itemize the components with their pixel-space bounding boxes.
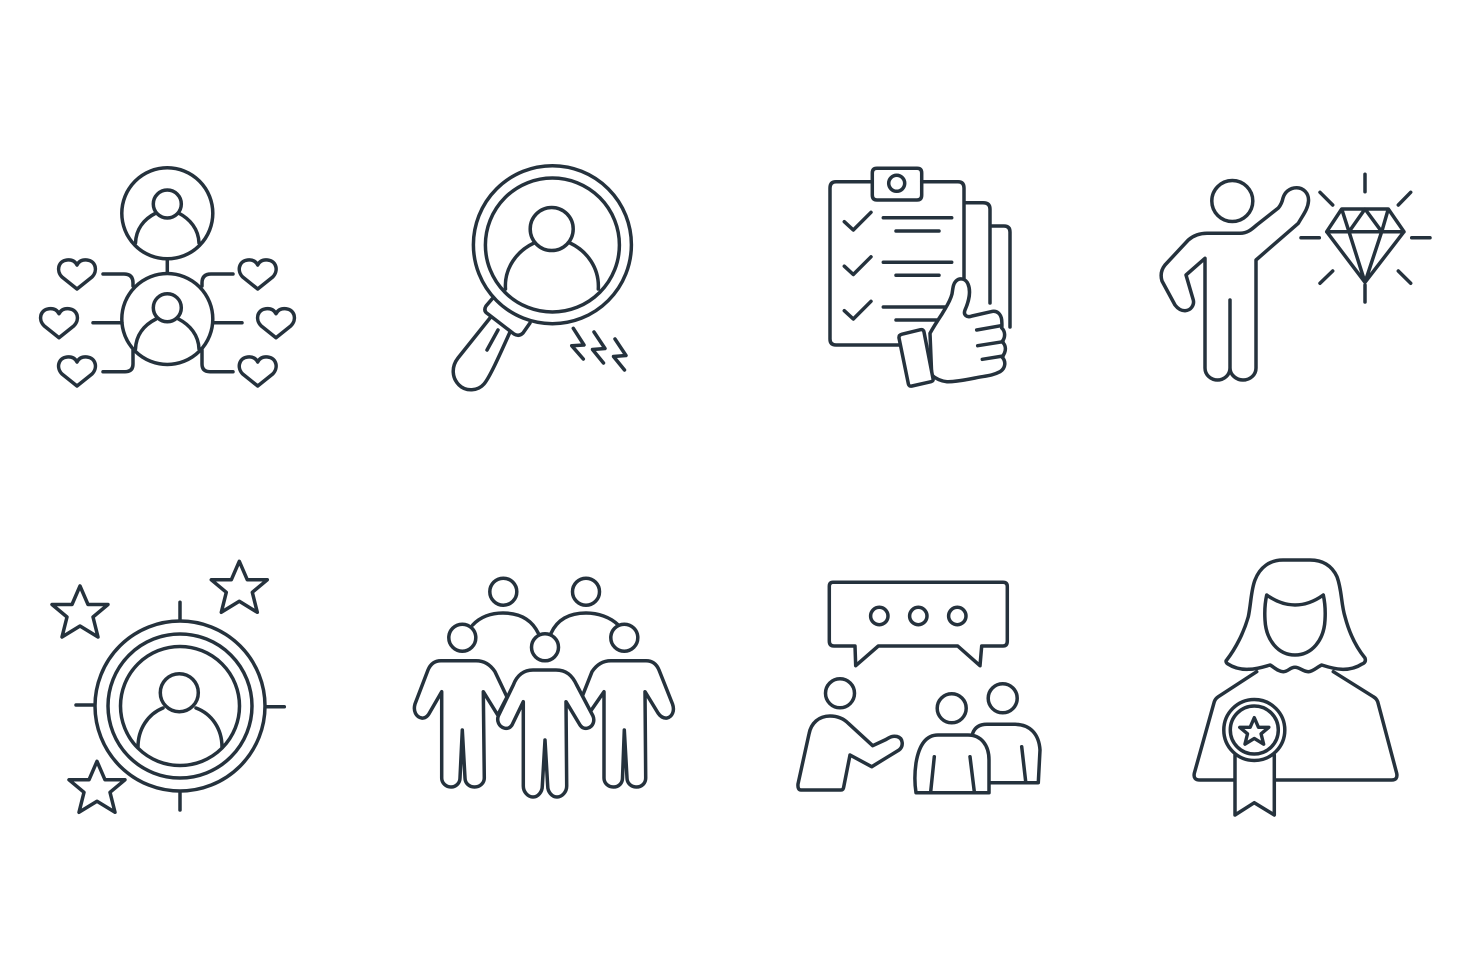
icon: speech bubble with meeting people <box>798 582 1040 793</box>
icon: person reaching for diamond <box>1161 174 1430 380</box>
icon: target on person with stars <box>52 561 284 812</box>
icon: magnifying glass over person <box>453 166 631 390</box>
icon: woman with award ribbon <box>1194 560 1397 815</box>
icon: people network with hearts <box>41 168 294 386</box>
icon: clipboard checklist with thumbs up <box>830 168 1010 386</box>
icon: connected team of people <box>414 578 673 797</box>
